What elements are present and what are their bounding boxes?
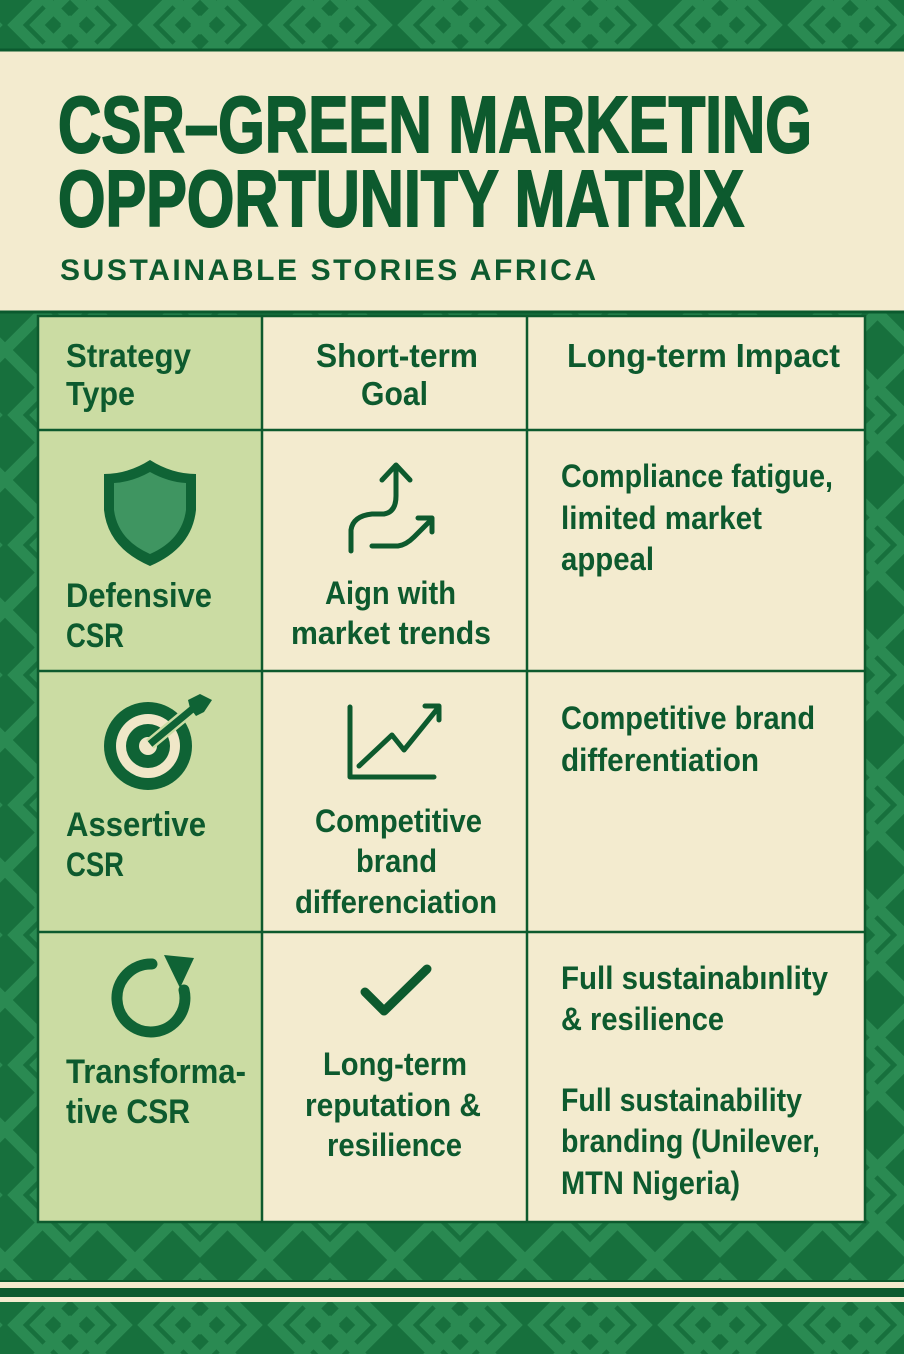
row: assertive: Competitive brand: [561, 700, 815, 736]
icon: checkmark: [365, 969, 427, 1011]
row: transformative: branding (Unilever,: [561, 1123, 820, 1159]
icon: shield: [104, 460, 196, 566]
icon: target: [104, 694, 212, 790]
row: transformative: resilience: [327, 1127, 462, 1163]
row: defensive: Defensive: [66, 577, 212, 615]
row: transformative: tive CSR: [66, 1093, 190, 1131]
row: assertive: [66, 694, 815, 920]
header panel: [0, 50, 904, 312]
row: transformative: & resilience: [561, 1001, 724, 1037]
row: defensive: appeal: [561, 541, 654, 577]
row: defensive: CSR: [66, 617, 124, 655]
icon: line chart: [350, 706, 439, 777]
header row: Long-term Impact: [567, 337, 840, 374]
row: assertive: differentiation: [561, 742, 759, 778]
row: transformative: Full sustainabınlity: [561, 960, 828, 996]
header row: Strategy: [66, 337, 192, 374]
row: transformative: Transforma-: [66, 1053, 246, 1091]
row: transformative: Long-term: [323, 1046, 467, 1082]
row: transformative: Full sustainability: [561, 1082, 802, 1118]
header row: [66, 337, 840, 412]
row: assertive: Competitive: [315, 803, 482, 839]
header row: Goal: [361, 375, 428, 412]
row: defensive: Aign with: [325, 575, 456, 611]
row: defensive: market trends: [291, 615, 491, 651]
bottom stripes: [0, 1280, 904, 1302]
icon: refresh arrow: [117, 955, 194, 1032]
header row: Short-term: [316, 337, 478, 374]
row: transformative: reputation &: [305, 1087, 481, 1123]
matrix table: [38, 316, 865, 1222]
title: [58, 80, 812, 243]
row: transformative: [66, 955, 828, 1201]
row: defensive: limited market: [561, 500, 762, 536]
header row: Type: [66, 375, 135, 412]
row: assertive: Assertive: [66, 806, 206, 844]
row: assertive: brand: [356, 843, 437, 879]
row: transformative: MTN Nigeria): [561, 1165, 740, 1201]
subtitle: SUSTAINABLE STORIES AFRICA: [60, 254, 596, 287]
row: assertive: CSR: [66, 846, 124, 884]
row: defensive: Compliance fatigue,: [561, 458, 833, 494]
row: assertive: differenciation: [295, 884, 497, 920]
icon: trend arrows: [351, 465, 432, 551]
row: defensive: [66, 458, 833, 655]
